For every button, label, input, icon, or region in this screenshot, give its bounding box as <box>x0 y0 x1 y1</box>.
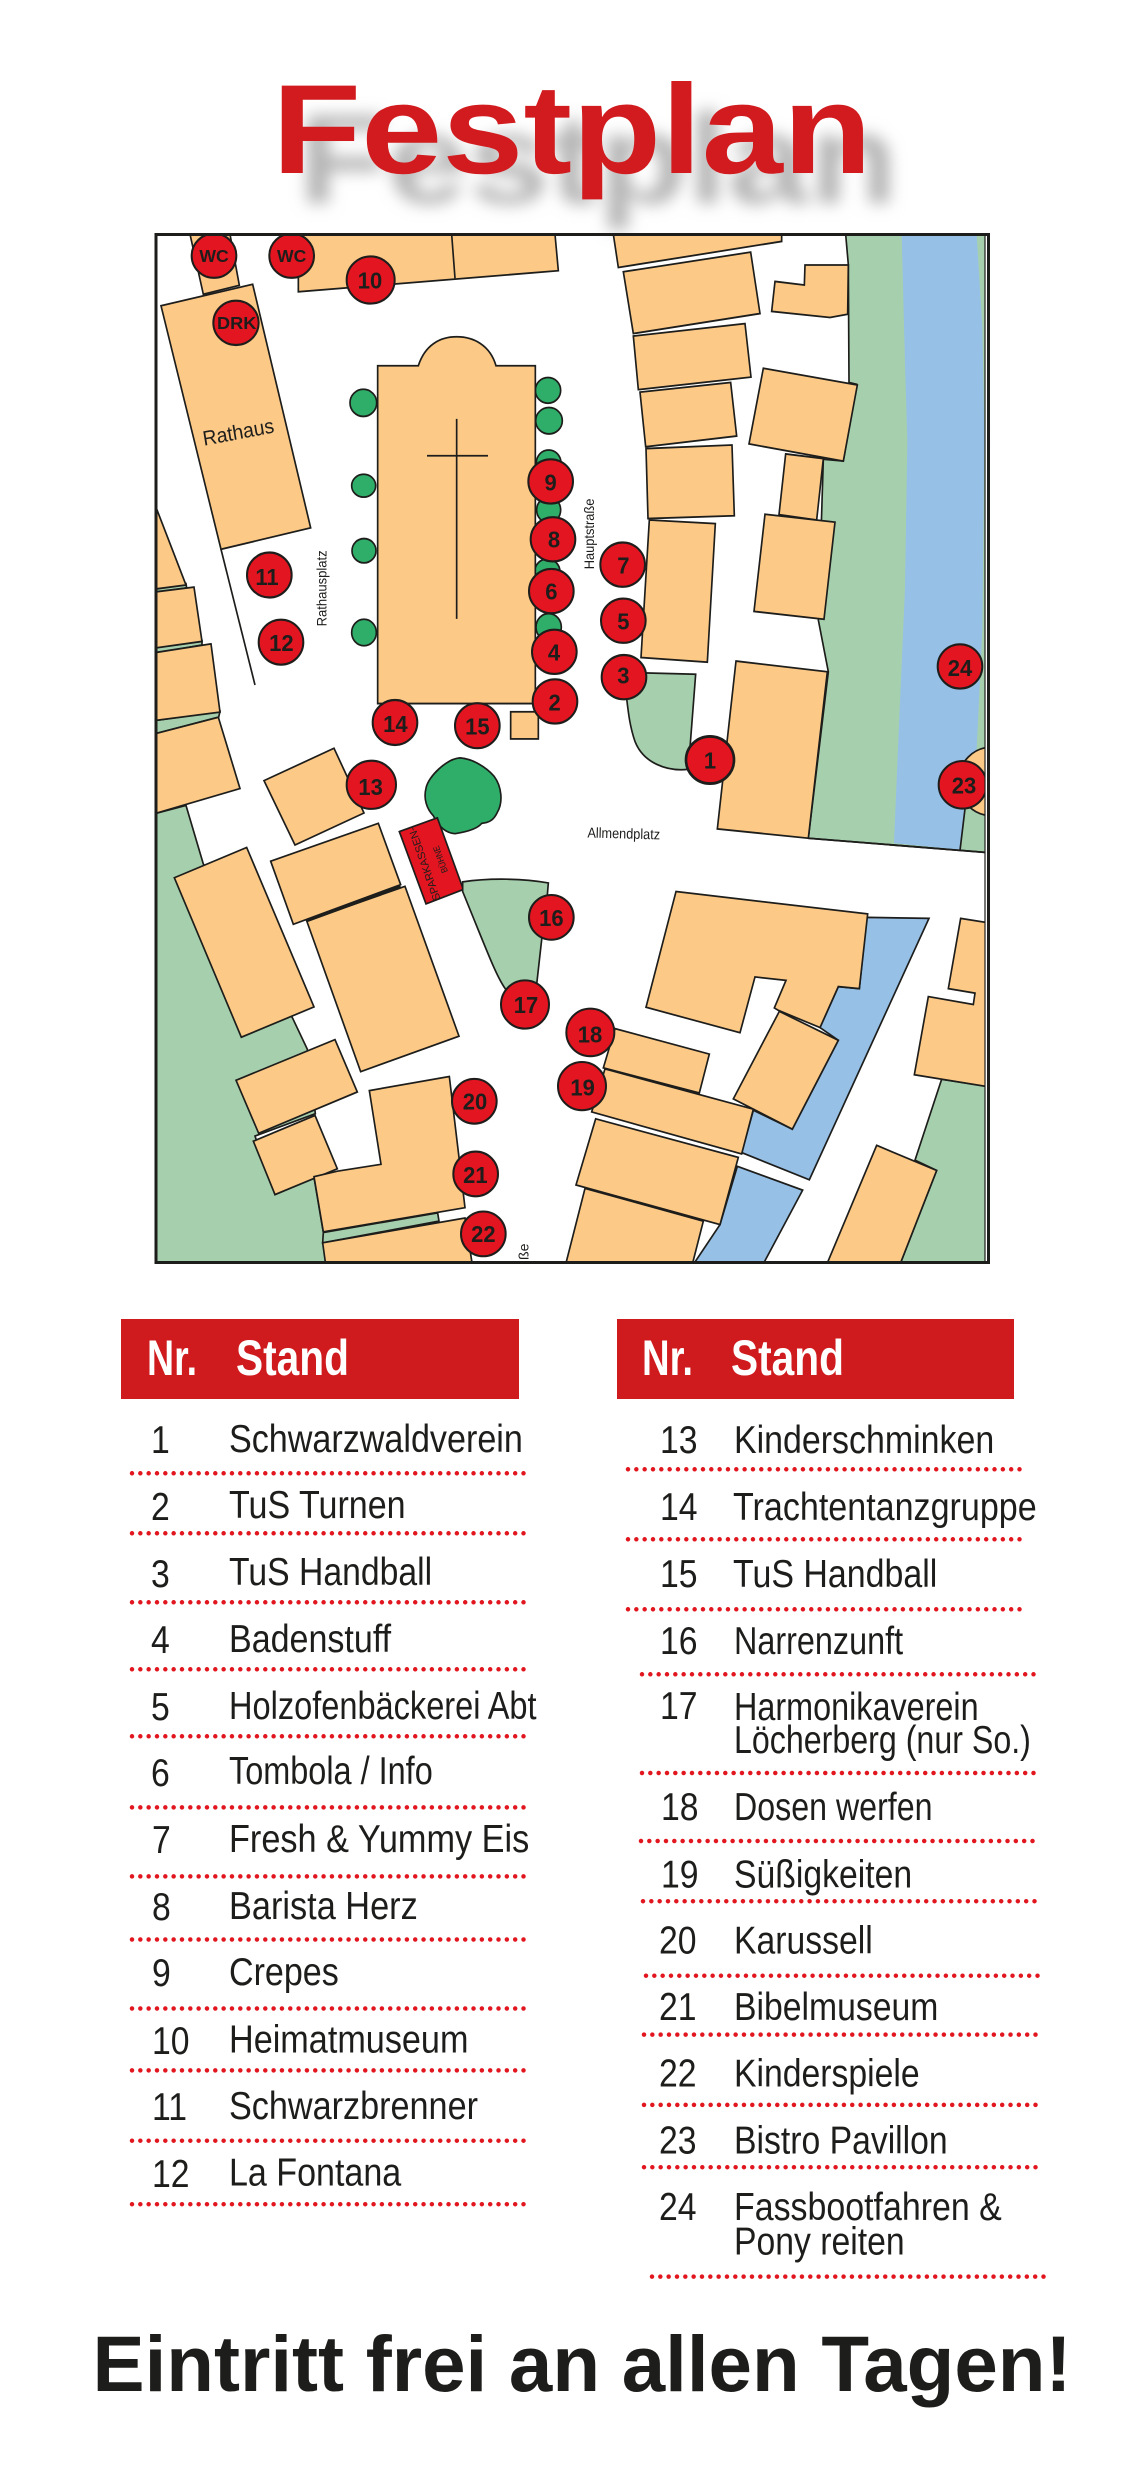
green strip <box>323 1213 439 1243</box>
table header left <box>121 1319 519 1399</box>
marker 14: 14 <box>383 710 408 737</box>
row 6: Tombola / Info <box>229 1749 433 1793</box>
row 5: Holzofenbäckerei Abt <box>229 1683 537 1728</box>
marker 9: 9 <box>545 469 557 496</box>
row 7: 7 <box>152 1818 171 1862</box>
canal lower section <box>692 1166 803 1267</box>
marker WC 2: WC <box>277 247 306 266</box>
marker 12: 12 <box>269 629 294 656</box>
marker 24 <box>938 644 982 689</box>
marker 9 <box>528 459 573 504</box>
river edge line <box>808 809 987 852</box>
row 24: Fassbootfahren & <box>734 2185 1002 2228</box>
marker 20 <box>452 1079 497 1124</box>
marker 19: 19 <box>570 1075 595 1101</box>
large building south of Allmendplatz <box>646 892 868 1033</box>
row 22: 22 <box>659 2051 697 2095</box>
marker 16 <box>529 895 574 940</box>
marker 5: 5 <box>617 608 630 634</box>
row 24: 24 <box>659 2185 697 2228</box>
row 1: 1 <box>151 1418 170 1462</box>
marker 17 <box>501 980 549 1029</box>
marker 14 <box>373 700 417 745</box>
map frame <box>156 234 988 1262</box>
label: Allmendplatz: Allmendplatz <box>587 825 660 843</box>
marker 21: 21 <box>463 1163 488 1188</box>
row 20: 20 <box>659 1918 697 1962</box>
marker 12 <box>259 620 303 665</box>
row 2 <box>151 1483 406 1529</box>
road edge line <box>221 549 255 685</box>
marker 22 <box>461 1211 506 1256</box>
marker 7: 7 <box>617 552 629 579</box>
pavilion building by 23 <box>964 747 984 816</box>
row 24: Pony reiten <box>734 2219 905 2263</box>
row 1: Schwarzwaldverein <box>229 1417 523 1461</box>
canal <box>742 917 929 1180</box>
row 24 <box>659 2185 1002 2263</box>
marker 4: 4 <box>548 639 560 666</box>
marker 18 <box>566 1009 614 1056</box>
marker 11: 11 <box>255 563 279 590</box>
title: Festplan <box>272 58 898 230</box>
church cross <box>427 419 488 619</box>
row 8: 8 <box>152 1885 171 1929</box>
building over the canal <box>733 1011 838 1129</box>
row 10: Heimatmuseum <box>229 2018 468 2061</box>
marker WC 2 <box>269 234 314 278</box>
marker 1: 1 <box>704 747 716 774</box>
marker 22: 22 <box>471 1222 496 1247</box>
trees right of the church <box>535 377 562 641</box>
table header left: Stand <box>236 1330 349 1386</box>
marker 13: 13 <box>358 775 383 800</box>
marker 10 <box>347 256 395 304</box>
label: Rathausplatz: Rathausplatz <box>315 550 331 626</box>
marker 3 <box>602 655 646 699</box>
houses by stands 18 and 19 <box>565 1029 753 1267</box>
table header right: Stand <box>731 1330 844 1386</box>
row 13: Kinderschminken <box>734 1418 994 1462</box>
buildings along the river <box>717 265 857 838</box>
marker 11 <box>247 552 292 597</box>
table header right <box>617 1319 1014 1399</box>
marker DRK <box>213 301 259 345</box>
marker 5 <box>601 599 646 643</box>
footer: Eintritt frei an allen Tagen!: Eintritt frei an allen Tagen! <box>92 2319 1072 2408</box>
marker 24: 24 <box>948 654 973 681</box>
title: Festplan: Festplan <box>272 58 872 200</box>
row 23: 23 <box>659 2118 697 2162</box>
table header right: Nr. <box>642 1330 693 1386</box>
row 17 <box>660 1684 1031 1762</box>
row 6 <box>151 1749 433 1795</box>
marker 8 <box>531 517 575 561</box>
green area bottom right <box>899 1079 987 1267</box>
building bottom right <box>826 1145 937 1267</box>
Rathaus building <box>161 284 311 549</box>
street name fragment: ße <box>517 1243 532 1260</box>
row 21: Bibelmuseum <box>734 1985 938 2029</box>
row 4 <box>151 1617 392 1662</box>
small building by the church <box>511 712 538 739</box>
row 16: 16 <box>660 1619 698 1663</box>
marker 20: 20 <box>463 1089 487 1115</box>
building on the right edge <box>914 918 987 1086</box>
row 9 <box>152 1950 339 1995</box>
row 20: Karussell <box>734 1918 873 1962</box>
row 19: Süßigkeiten <box>734 1852 912 1896</box>
row 15: 15 <box>660 1552 698 1596</box>
marker 2 <box>533 679 577 724</box>
marker DRK: DRK <box>217 313 256 333</box>
marker 4 <box>532 630 577 674</box>
church <box>378 337 535 704</box>
marker 19 <box>558 1062 606 1110</box>
label: Hauptstraße: Hauptstraße <box>582 499 598 569</box>
row 12: La Fontana <box>229 2150 402 2194</box>
row 9: Crepes <box>229 1950 339 1994</box>
green space by stand 1 and 3 <box>627 673 696 770</box>
row 8: Barista Herz <box>229 1884 418 1927</box>
right list <box>659 1418 1037 2263</box>
row 2: TuS Turnen <box>229 1483 406 1527</box>
row 17: Harmonikaverein <box>734 1685 979 1729</box>
row 9: 9 <box>152 1951 171 1995</box>
Sparkassen-Bühne stage: SPARKASSEN- <box>407 825 443 902</box>
row 16 <box>660 1619 903 1663</box>
marker 23: 23 <box>952 773 976 799</box>
buildings west of Allmendplatz <box>174 748 459 1195</box>
marker 6: 6 <box>545 578 557 605</box>
row 8 <box>152 1884 418 1929</box>
row 3: 3 <box>151 1552 170 1596</box>
marker 15: 15 <box>465 713 490 740</box>
row 18: 18 <box>661 1785 699 1829</box>
marker WC 1: WC <box>199 247 229 266</box>
row 11: 11 <box>152 2085 187 2129</box>
row 13: 13 <box>660 1418 698 1462</box>
building on the left edge lower <box>153 717 240 814</box>
row 6: 6 <box>151 1751 170 1795</box>
map <box>153 234 1025 1267</box>
marker 7 <box>600 542 645 587</box>
row 16: Narrenzunft <box>734 1619 903 1663</box>
title: Festplan: Festplan <box>298 88 898 230</box>
row 4: 4 <box>151 1618 170 1662</box>
marker 1 <box>686 736 734 784</box>
marker 6 <box>529 569 574 613</box>
row 4: Badenstuff <box>229 1617 392 1661</box>
marker 8: 8 <box>548 526 560 553</box>
green bank along the river <box>808 234 987 852</box>
row 19: 19 <box>661 1852 699 1896</box>
building row on the Hauptstraße <box>613 234 782 662</box>
marker 17: 17 <box>514 992 538 1018</box>
L-shaped building <box>314 1076 465 1232</box>
bottom building <box>323 1218 473 1267</box>
table header left: Nr. <box>147 1330 197 1386</box>
river <box>894 234 984 850</box>
green area bottom left <box>153 805 326 1267</box>
marker 10: 10 <box>358 267 382 294</box>
green space by stand 16 and 17 <box>463 879 548 990</box>
row 5: 5 <box>151 1685 170 1729</box>
row 21: 21 <box>659 1985 697 2029</box>
trees left of the church <box>350 389 377 646</box>
marker 21 <box>453 1152 498 1196</box>
marker 18: 18 <box>578 1022 602 1047</box>
row 18: Dosen werfen <box>734 1785 933 1829</box>
marker 15 <box>455 703 500 748</box>
marker 3: 3 <box>617 662 629 689</box>
row 15: TuS Handball <box>733 1552 937 1596</box>
marker 2: 2 <box>549 689 561 716</box>
row 14: Trachtentanzgruppe <box>733 1485 1037 1529</box>
row 7: Fresh & Yummy Eis <box>229 1817 529 1860</box>
left list <box>151 1417 537 2196</box>
row 3: TuS Handball <box>229 1550 432 1594</box>
Heimatmuseum building <box>298 234 558 292</box>
row 17: Löcherberg (nur So.) <box>734 1718 1031 1762</box>
big tree <box>425 758 501 834</box>
marker 16: 16 <box>539 906 564 931</box>
marker 13 <box>347 761 396 809</box>
top-left strip building <box>190 234 239 294</box>
row 17: 17 <box>660 1684 698 1728</box>
row 23: Bistro Pavillon <box>734 2118 948 2162</box>
Sparkassen-Bühne stage <box>399 818 463 904</box>
row 12 <box>152 2150 402 2196</box>
row 20 <box>659 1918 873 1962</box>
row 14: 14 <box>660 1485 698 1529</box>
row 3 <box>151 1550 432 1596</box>
row 2: 2 <box>151 1485 170 1529</box>
row 22: Kinderspiele <box>734 2051 920 2095</box>
buildings on the left edge <box>153 500 220 734</box>
label: Rathaus: Rathaus <box>201 415 276 451</box>
row 10: 10 <box>152 2019 190 2063</box>
Sparkassen-Bühne stage: BÜHNE <box>431 844 450 874</box>
row 12: 12 <box>152 2152 190 2196</box>
row 11: Schwarzbrenner <box>229 2084 478 2127</box>
marker WC 1 <box>192 234 236 278</box>
